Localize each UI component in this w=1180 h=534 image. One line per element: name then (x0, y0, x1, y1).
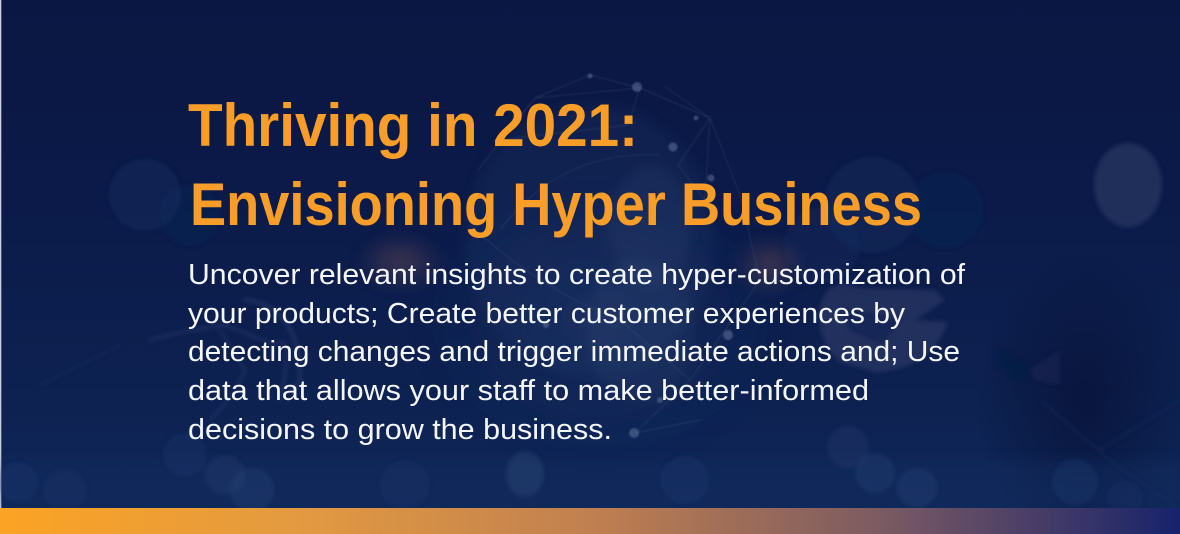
title (188, 92, 922, 238)
body text: your products; Create better customer experiences by (188, 298, 906, 330)
body text: data that allows your staff to make better-informed (188, 375, 869, 407)
bottom gradient bar (0, 508, 1180, 534)
bokeh circles (0, 143, 1162, 516)
hand on the right (819, 284, 1180, 510)
title: Thriving in 2021: (188, 92, 638, 159)
warm glows behind the globe and hands (355, 170, 805, 470)
hand on the left (40, 300, 300, 420)
body text: decisions to grow the business. (188, 414, 612, 446)
body text (188, 259, 966, 446)
body text: detecting changes and trigger immediate actions and; Use (188, 336, 960, 368)
globe with network lines (465, 74, 760, 438)
title: Envisioning Hyper Business (190, 171, 922, 238)
body text: Uncover relevant insights to create hyper-customization of (188, 259, 966, 291)
